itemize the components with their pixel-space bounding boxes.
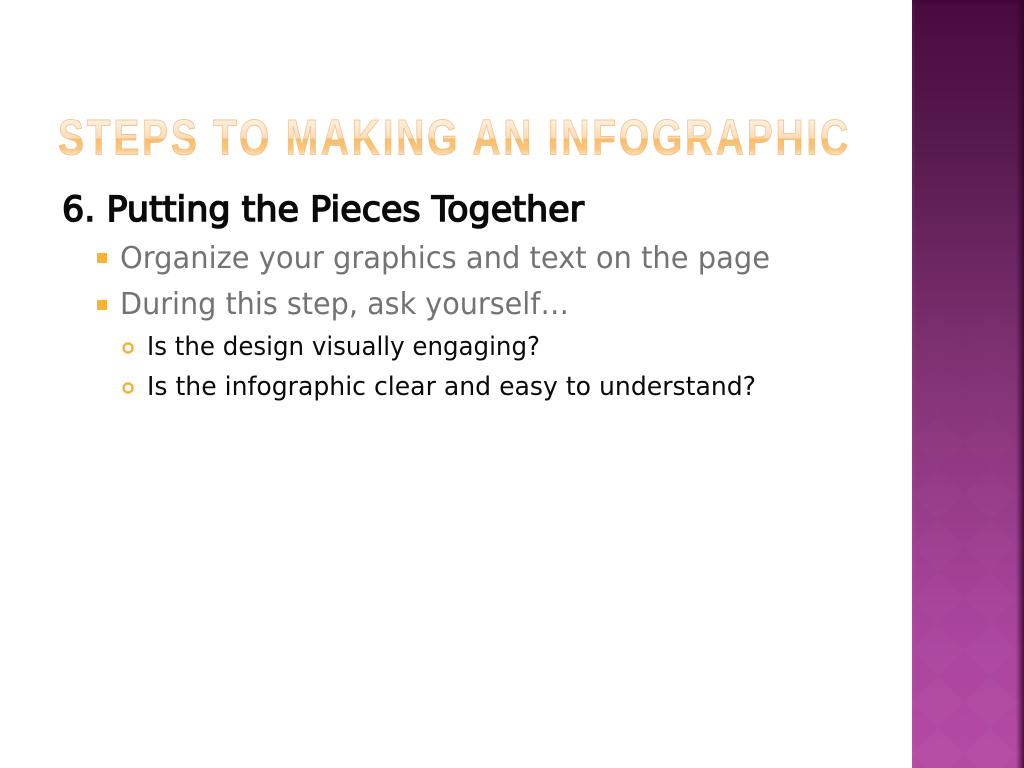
icon: square bullet (97, 253, 107, 263)
text: during this step: During this step, ask yourself… (120, 287, 569, 322)
text: design question: Is the design visually engaging? (147, 332, 540, 362)
icon: square bullet (97, 300, 107, 310)
sub-bullet group: clear (124, 372, 756, 402)
text: organize: Organize your graphics and text on the page (120, 241, 770, 276)
icon: ring bullet (124, 344, 132, 352)
sidebar: purple gradient band (912, 0, 1024, 768)
text: clarity question: Is the infographic clear and easy to understand? (147, 372, 756, 402)
icon: ring bullet (124, 384, 132, 392)
bullet group: during this step (97, 287, 569, 322)
title: STEPS TO MAKING AN INFOGRAPHIC (58, 109, 848, 166)
heading: step 6: 6. Putting the Pieces Together (62, 190, 585, 230)
sub-bullet group: engaging (124, 332, 540, 362)
bullet group: organize (97, 241, 770, 276)
